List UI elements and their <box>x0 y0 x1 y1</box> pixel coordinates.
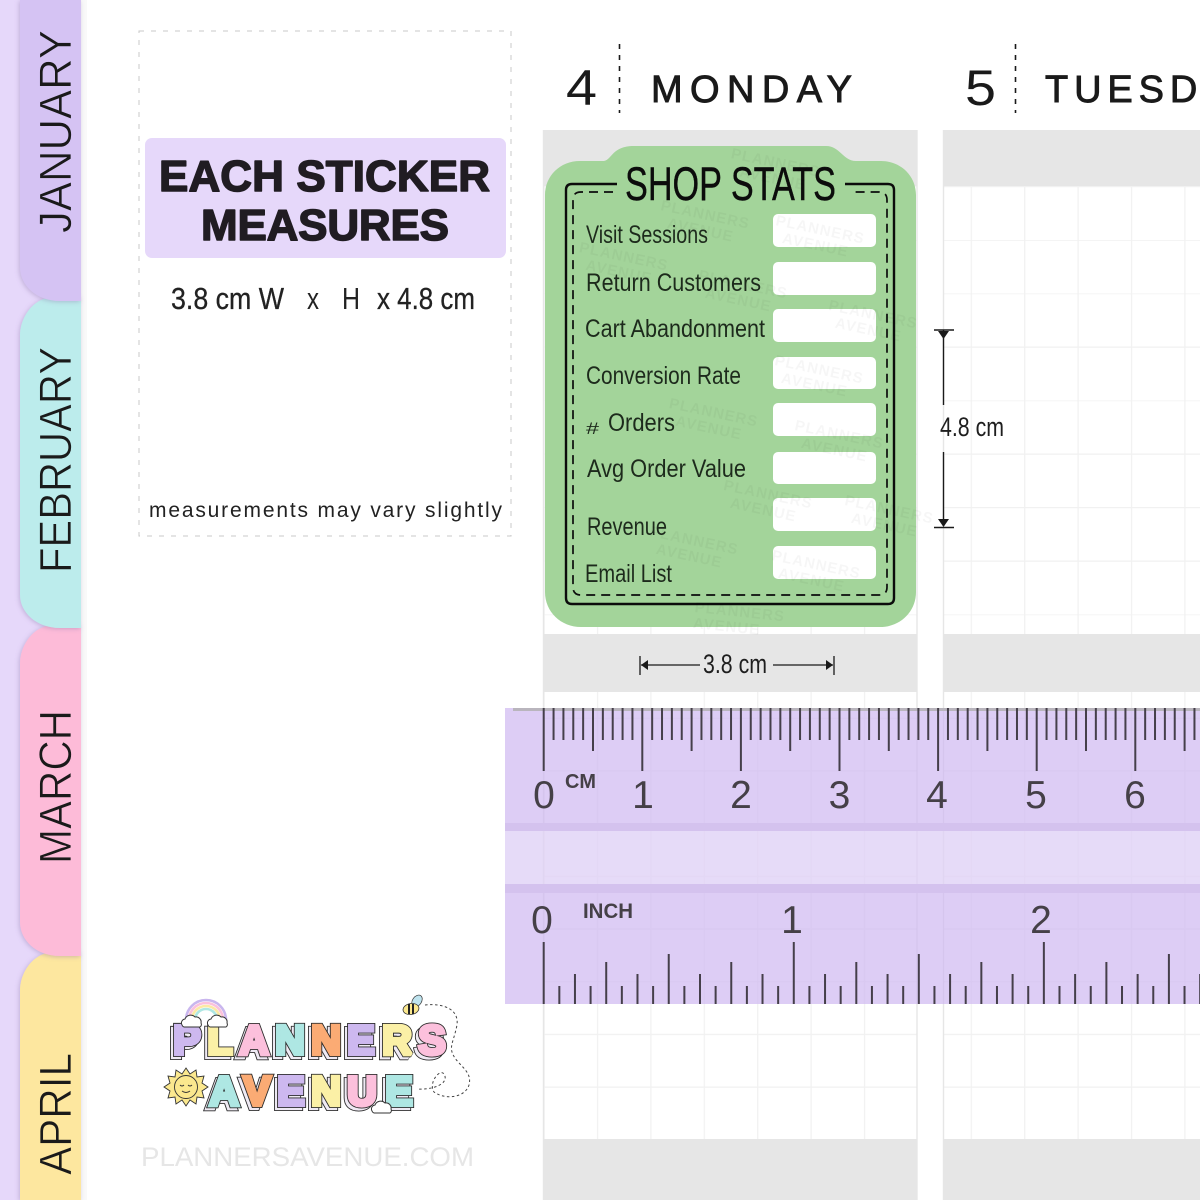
icon: bee <box>402 993 424 1016</box>
text: disclaimer: measurements may vary slightly <box>149 499 502 522</box>
watermarks: PLANNERS <box>773 352 865 388</box>
centimetre numbers <box>533 771 1146 817</box>
word: AVENUE: AVENUE <box>209 1068 413 1114</box>
field labels: Avg Order Value <box>587 455 746 483</box>
centimetre numbers: 0 <box>533 774 555 817</box>
word: PLANNERS: PLANNERS <box>170 1020 443 1066</box>
panel: month tabs sidebar <box>0 0 87 1200</box>
watermarks: PLANNERS <box>697 267 789 303</box>
panel: planner column Tuesday <box>943 130 1200 1200</box>
heading: day 5 Tuesday <box>965 44 1200 116</box>
centimetre numbers: 1 <box>632 774 654 817</box>
text: website: PLANNERSAVENUE.COM <box>141 1142 474 1172</box>
watermarks: AVENUE <box>674 413 743 443</box>
centimetre numbers: 2 <box>730 774 752 817</box>
word: PLANNERS: PLANNERS <box>173 1017 446 1063</box>
watermarks: AVENUE <box>704 285 773 315</box>
watermarks: PLANNERS <box>770 547 862 583</box>
centimetre numbers: 6 <box>1124 774 1146 817</box>
tab: April: APRIL <box>30 1053 81 1175</box>
watermarks: AVENUE <box>781 230 850 261</box>
panel: measurement info box <box>139 31 511 536</box>
centimetre ticks <box>544 708 1194 771</box>
tab: January <box>20 0 81 301</box>
text: dimensions: x <box>307 281 319 316</box>
watermarks: PLANNERS <box>730 145 822 181</box>
sticker frame <box>566 184 894 604</box>
watermarks: PLANNERS <box>793 417 885 453</box>
watermarks: AVENUE <box>738 163 807 194</box>
centimetre numbers: 4 <box>926 774 948 817</box>
heading: each sticker measures: MEASURES <box>201 201 449 250</box>
ruler <box>505 708 1200 1004</box>
inch numbers: 2 <box>1030 899 1052 942</box>
field labels: Revenue <box>587 513 667 541</box>
rainbow <box>186 1000 226 1020</box>
word: AVENUE: AVENUE <box>209 1068 413 1114</box>
watermarks: PLANNERS <box>659 197 751 233</box>
inch ticks <box>544 942 1200 1004</box>
field labels: # <box>586 419 600 438</box>
inch numbers <box>531 899 1052 942</box>
tab: January: JANUARY <box>30 30 81 233</box>
inch numbers: INCH <box>583 900 633 923</box>
ruler body <box>505 708 1200 1004</box>
clouds <box>181 1015 391 1113</box>
heading: day 5 Tuesday: 5 <box>965 60 996 116</box>
watermarks: PLANNERS <box>827 297 919 333</box>
word: AVENUE: AVENUE <box>206 1071 410 1117</box>
field labels: Return Customers <box>586 269 761 297</box>
inch numbers: 0 <box>531 899 553 942</box>
watermarks: AVENUE <box>692 615 761 639</box>
panel: planner column Monday <box>543 130 917 1200</box>
watermarks: AVENUE <box>666 215 735 246</box>
sticker title: SHOP STATS <box>625 157 836 210</box>
word: PLANNERS: PLANNERS <box>170 1020 443 1066</box>
heading: each sticker measures: EACH STICKER <box>159 152 490 201</box>
arrow: width dimension: 3.8 cm <box>703 649 767 679</box>
tab: March: MARCH <box>30 710 81 864</box>
field labels: Email List <box>585 560 672 588</box>
centimetre numbers: CM <box>565 771 596 793</box>
watermarks: AVENUE <box>654 541 724 572</box>
sticker: shop stats <box>545 145 935 641</box>
watermarks: PLANNERS <box>843 492 935 528</box>
field labels: Orders <box>608 409 675 437</box>
logo: Planners Avenue <box>164 993 470 1117</box>
tab: February <box>20 297 81 628</box>
watermarks: AVENUE <box>850 510 919 541</box>
sticker background <box>545 146 916 627</box>
watermarks: PLANNERS <box>668 395 760 431</box>
watermarks: PLANNERS <box>774 212 866 248</box>
watermarks: AVENUE <box>729 495 798 525</box>
watermarks: PLANNERS <box>648 523 740 559</box>
watermarks: AVENUE <box>834 315 903 345</box>
arrow: height dimension <box>934 330 1004 528</box>
tab: April <box>20 952 81 1200</box>
word: PLANNERS: PLANNERS <box>173 1017 446 1063</box>
watermarks: AVENUE <box>800 435 869 466</box>
watermarks: PLANNERS <box>722 477 814 513</box>
tab: February: FEBRUARY <box>30 347 81 573</box>
dotted flight path <box>418 1005 470 1097</box>
heading: each sticker measures <box>145 138 506 258</box>
text: dimensions <box>171 281 475 316</box>
watermarks: PLANNERS <box>578 239 670 275</box>
field labels: Conversion Rate <box>586 362 741 390</box>
arrow: width dimension <box>640 649 834 679</box>
field labels <box>585 221 765 588</box>
icon: sun <box>164 1068 208 1106</box>
inch numbers: 1 <box>781 899 803 942</box>
text: dimensions: H <box>342 281 360 316</box>
heading: day 4 Monday: 4 <box>566 60 597 116</box>
watermarks: PLANNERS <box>694 599 786 625</box>
arrow: height dimension: 4.8 cm <box>940 412 1004 442</box>
field labels: Cart Abandonment <box>585 315 765 343</box>
centimetre numbers: 3 <box>829 774 850 817</box>
word: AVENUE: AVENUE <box>206 1071 410 1117</box>
watermarks: AVENUE <box>584 257 654 288</box>
fill-in boxes <box>773 214 876 579</box>
watermarks: AVENUE <box>777 565 846 596</box>
text: dimensions: x 4.8 cm <box>377 281 475 316</box>
heading: day 4 Monday: MONDAY <box>651 69 852 111</box>
watermarks: AVENUE <box>780 370 849 401</box>
tab: March <box>20 625 81 956</box>
heading: day 4 Monday <box>566 44 852 116</box>
centimetre numbers: 5 <box>1025 774 1047 817</box>
text: dimensions: 3.8 cm W <box>171 281 285 316</box>
watermarks <box>574 145 935 641</box>
field labels: Visit Sessions <box>586 221 708 249</box>
